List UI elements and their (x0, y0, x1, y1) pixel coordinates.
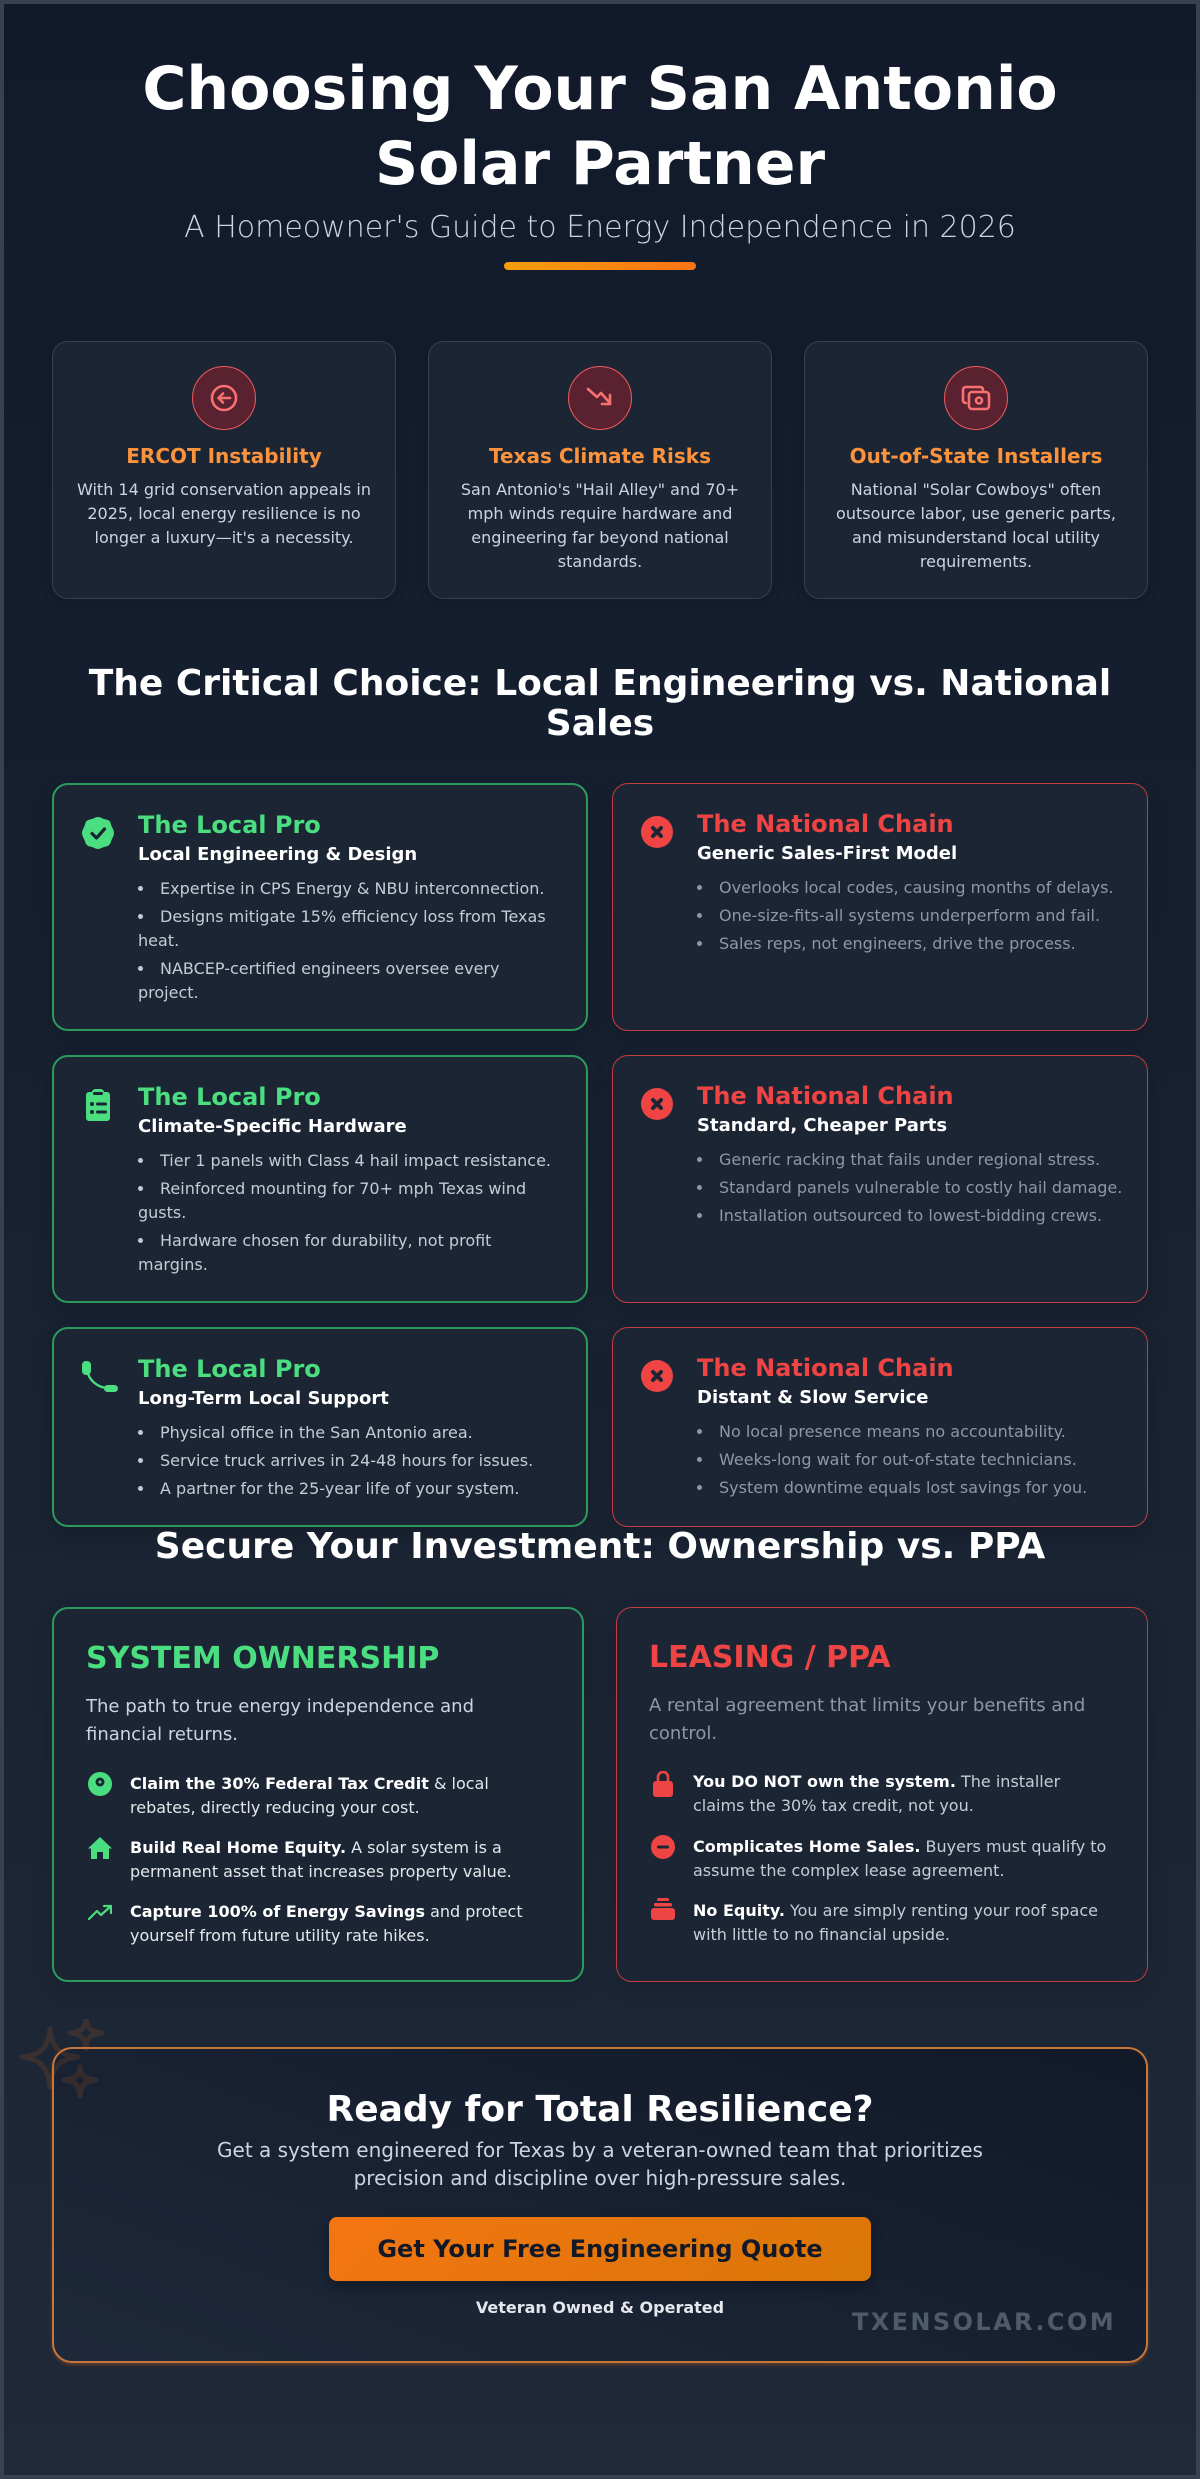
body text: National "Solar Cowboys" often (851, 480, 1101, 499)
body text: longer a luxury—it's a necessity. (95, 528, 353, 547)
heading: The National Chain (697, 1082, 954, 1110)
panel: national chain parts (612, 1055, 1148, 1303)
icon: x circle (641, 816, 673, 848)
bullet list: One-size-fits-all systems underperform and fail. (719, 906, 1100, 925)
icon: minus circle (651, 1835, 675, 1859)
bullet list (697, 1150, 1122, 1225)
bullet list: project. (138, 983, 199, 1002)
benefit: home equity (88, 1837, 512, 1881)
bullet list: heat. (138, 931, 179, 950)
drawback: home sales (651, 1835, 1106, 1880)
benefit text: rebates, directly reducing your cost. (130, 1798, 420, 1817)
description: Get a system engineered for Texas by a veteran-owned team that prioritizes (217, 2138, 983, 2162)
icon: phone (82, 1361, 118, 1392)
bullet list: Hardware chosen for durability, not profit (160, 1231, 491, 1250)
heading: SYSTEM OWNERSHIP (86, 1641, 439, 1676)
benefit text: Capture 100% of Energy Savings and protect (130, 1902, 523, 1921)
drawback: ownership (653, 1771, 1060, 1815)
description: A rental agreement that limits your benefits and (649, 1695, 1085, 1716)
icon: clipboard list (86, 1089, 110, 1121)
benefit text: permanent asset that increases property value. (130, 1862, 512, 1881)
heading: Ready for Total Resilience? (326, 2089, 874, 2130)
bullet list: Installation outsourced to lowest-bidding crews. (719, 1206, 1102, 1225)
icon: x circle (641, 1360, 673, 1392)
subheading: Long-Term Local Support (138, 1388, 389, 1409)
heading: ERCOT Instability (126, 444, 322, 468)
drawback: no equity (651, 1898, 1098, 1944)
body text: 2025, local energy resilience is no (87, 504, 361, 523)
drawback text (693, 1901, 1098, 1944)
icon: downward trend arrow (568, 366, 632, 430)
heading: LEASING / PPA (649, 1640, 891, 1675)
bullet list: Tier 1 panels with Class 4 hail impact resistance. (160, 1151, 551, 1170)
description (217, 2138, 983, 2190)
bullet list: System downtime equals lost savings for you. (719, 1478, 1087, 1497)
heading: critical choice (88, 663, 1111, 744)
icon: lock (653, 1771, 673, 1797)
benefit: tax credit (88, 1772, 489, 1817)
body text: and misunderstand local utility (852, 528, 1100, 547)
title: Solar Partner (375, 129, 825, 199)
benefit: energy savings (88, 1902, 523, 1945)
body text (836, 480, 1116, 571)
description: The path to true energy independence and (86, 1696, 474, 1717)
title (142, 54, 1058, 199)
drawback text: No Equity. You are simply renting your roof space (693, 1901, 1098, 1920)
panel: leasing / PPA (616, 1607, 1148, 1982)
subheading: Distant & Slow Service (697, 1387, 928, 1408)
body text: With 14 grid conservation appeals in (77, 480, 371, 499)
button (329, 2217, 871, 2281)
icon: x circle (641, 1088, 673, 1120)
title underline accent (504, 262, 696, 270)
description (86, 1696, 474, 1745)
icon: coin (88, 1772, 112, 1796)
bullet list (138, 1151, 551, 1274)
body text (77, 480, 371, 547)
drawback text: with little to no financial upside. (693, 1925, 950, 1944)
panel: call to action (52, 2047, 1148, 2363)
benefit text (130, 1774, 489, 1817)
bullet list (697, 878, 1114, 953)
bullet list: NABCEP-certified engineers oversee every (160, 959, 499, 978)
panel: national chain service (612, 1327, 1148, 1527)
subheading: Climate-Specific Hardware (138, 1116, 407, 1137)
title: Choosing Your San Antonio (142, 54, 1058, 124)
description: precision and discipline over high-pressure sales. (354, 2166, 846, 2190)
panel: local pro hardware (52, 1055, 588, 1303)
icon: rising trend (88, 1904, 112, 1920)
bullet list: Overlooks local codes, causing months of delays. (719, 878, 1114, 897)
description: control. (649, 1723, 717, 1744)
description (649, 1695, 1085, 1744)
panel: local pro engineering (52, 783, 588, 1031)
subtitle: A Homeowner's Guide to Energy Independence in 2026 (184, 210, 1016, 245)
body text: outsource labor, use generic parts, (836, 504, 1116, 523)
heading: critical choice: Sales (546, 703, 654, 744)
panel: Texas climate risks (428, 341, 772, 599)
drawback text: assume the complex lease agreement. (693, 1861, 1005, 1880)
benefit text: yourself from future utility rate hikes. (130, 1926, 430, 1945)
bullet list: Designs mitigate 15% efficiency loss from Texas (160, 907, 546, 926)
icon: circled left arrow (192, 366, 256, 430)
bullet list: Service truck arrives in 24-48 hours for issues. (160, 1451, 533, 1470)
heading: The Local Pro (138, 1355, 321, 1383)
heading: critical choice: The Critical Choice: Local Engineering vs. National (89, 663, 1111, 704)
icon: decorative sparkles (20, 2019, 104, 2098)
drawback text: You DO NOT own the system. The installer (693, 1772, 1060, 1791)
heading: The Local Pro (138, 811, 321, 839)
benefit text: Claim the 30% Federal Tax Credit & local (130, 1774, 489, 1793)
heading: The National Chain (697, 810, 954, 838)
benefit text (130, 1838, 512, 1881)
bullet list (697, 1422, 1087, 1497)
heading: Out-of-State Installers (850, 444, 1102, 468)
bullet list: Generic racking that fails under regional stress. (719, 1150, 1100, 1169)
drawback text: Complicates Home Sales. Buyers must qualify to (693, 1837, 1106, 1856)
icon: house (88, 1837, 112, 1859)
bullet list: margins. (138, 1255, 208, 1274)
icon: money bills (944, 366, 1008, 430)
panel: local pro support (52, 1327, 588, 1527)
heading: The National Chain (697, 1354, 954, 1382)
bullet list (138, 1423, 533, 1498)
subheading: Generic Sales-First Model (697, 843, 957, 864)
bullet list: Expertise in CPS Energy & NBU interconnection. (160, 879, 544, 898)
drawback text (693, 1837, 1106, 1880)
button: Get Your Free Engineering Quote (377, 2235, 823, 2263)
panel: national chain sales (612, 783, 1148, 1031)
body text: San Antonio's "Hail Alley" and 70+ (461, 480, 739, 499)
panel: out-of-state installers (804, 341, 1148, 599)
body text (461, 480, 739, 571)
bullet list: Reinforced mounting for 70+ mph Texas wind (160, 1179, 526, 1198)
bullet list: Physical office in the San Antonio area. (160, 1423, 473, 1442)
subheading: Standard, Cheaper Parts (697, 1115, 947, 1136)
bullet list: Sales reps, not engineers, drive the process. (719, 934, 1076, 953)
panel: ERCOT instability (52, 341, 396, 599)
website watermark: TXENSOLAR.COM (852, 2308, 1116, 2336)
heading: secure your investment: Secure Your Investment: Ownership vs. PPA (155, 1526, 1045, 1567)
bullet list: No local presence means no accountability. (719, 1422, 1066, 1441)
bullet list (138, 879, 546, 1002)
description: financial returns. (86, 1724, 238, 1745)
icon: badge check (82, 817, 114, 849)
subheading: Local Engineering & Design (138, 844, 417, 865)
bullet list: Standard panels vulnerable to costly hail damage. (719, 1178, 1122, 1197)
body text: mph winds require hardware and (468, 504, 732, 523)
drawback text (692, 1772, 1060, 1815)
veteran note: Veteran Owned & Operated (476, 2298, 724, 2317)
icon: stacked layers (651, 1898, 675, 1920)
body text: engineering far beyond national (471, 528, 729, 547)
panel: system ownership (52, 1607, 584, 1982)
bullet list: Weeks-long wait for out-of-state technicians. (719, 1450, 1077, 1469)
body text: requirements. (920, 552, 1032, 571)
benefit text (130, 1902, 523, 1945)
benefit text: Build Real Home Equity. A solar system is a (130, 1838, 502, 1857)
heading: Texas Climate Risks (489, 444, 711, 468)
body text: standards. (558, 552, 642, 571)
heading: The Local Pro (138, 1083, 321, 1111)
drawback text: claims the 30% tax credit, not you. (693, 1796, 974, 1815)
bullet list: gusts. (138, 1203, 186, 1222)
bullet list: A partner for the 25-year life of your system. (160, 1479, 520, 1498)
